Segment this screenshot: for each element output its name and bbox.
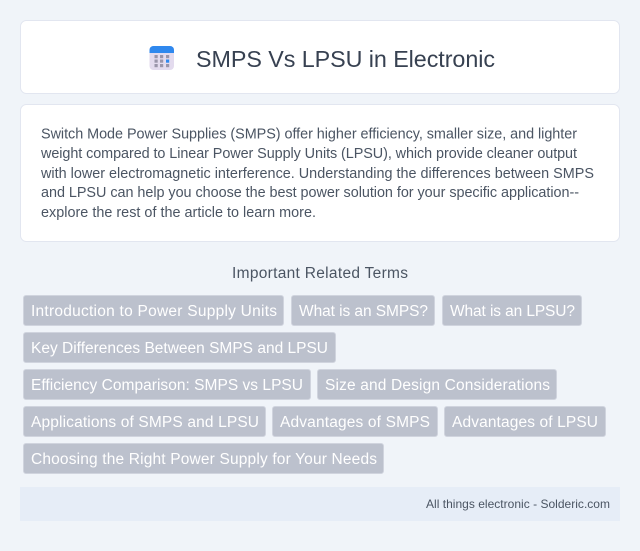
tag list [24,296,606,474]
panel: summary [20,104,620,242]
tag: Efficiency Comparison: SMPS vs LPSU [31,377,303,394]
tag: Applications of SMPS and LPSU [31,414,259,431]
tag [24,296,284,326]
tag: Key Differences Between SMPS and LPSU [31,340,328,357]
summary text: Switch Mode Power Supplies (SMPS) offer higher efficiency, smaller size, and lighter [41,126,577,142]
footer [20,487,620,521]
header panel [20,20,620,94]
tag: What is an SMPS? [299,303,428,320]
icon: calendar [150,46,174,70]
tag [272,406,438,436]
tag [24,332,336,362]
heading: related terms: Important Related Terms [232,265,408,282]
tag [24,406,266,436]
summary text: with lower electromagnetic interference. Understanding the differences between SMPS [40,166,594,182]
tag [292,296,434,326]
summary text: explore the rest of the article to learn more. [41,205,316,221]
summary text: weight compared to Linear Power Supply Units (LPSU), which provide cleaner output [40,146,577,162]
tag [318,370,556,400]
tag: Advantages of LPSU [452,414,598,431]
footer credit: All things electronic - Solderic.com [426,497,610,511]
tag [442,296,582,326]
tag [24,444,384,474]
tag: Size and Design Considerations [325,377,550,394]
summary text: and LPSU can help you choose the best power solution for your specific application-- [41,185,579,201]
tag: Introduction to Power Supply Units [31,303,277,320]
tag: Choosing the Right Power Supply for Your Needs [31,451,377,468]
summary text [40,126,594,221]
tag: What is an LPSU? [450,303,575,320]
tag: Advantages of SMPS [280,414,430,431]
title: SMPS Vs LPSU in Electronic [196,46,495,72]
tag [24,370,310,400]
tag [444,406,606,436]
